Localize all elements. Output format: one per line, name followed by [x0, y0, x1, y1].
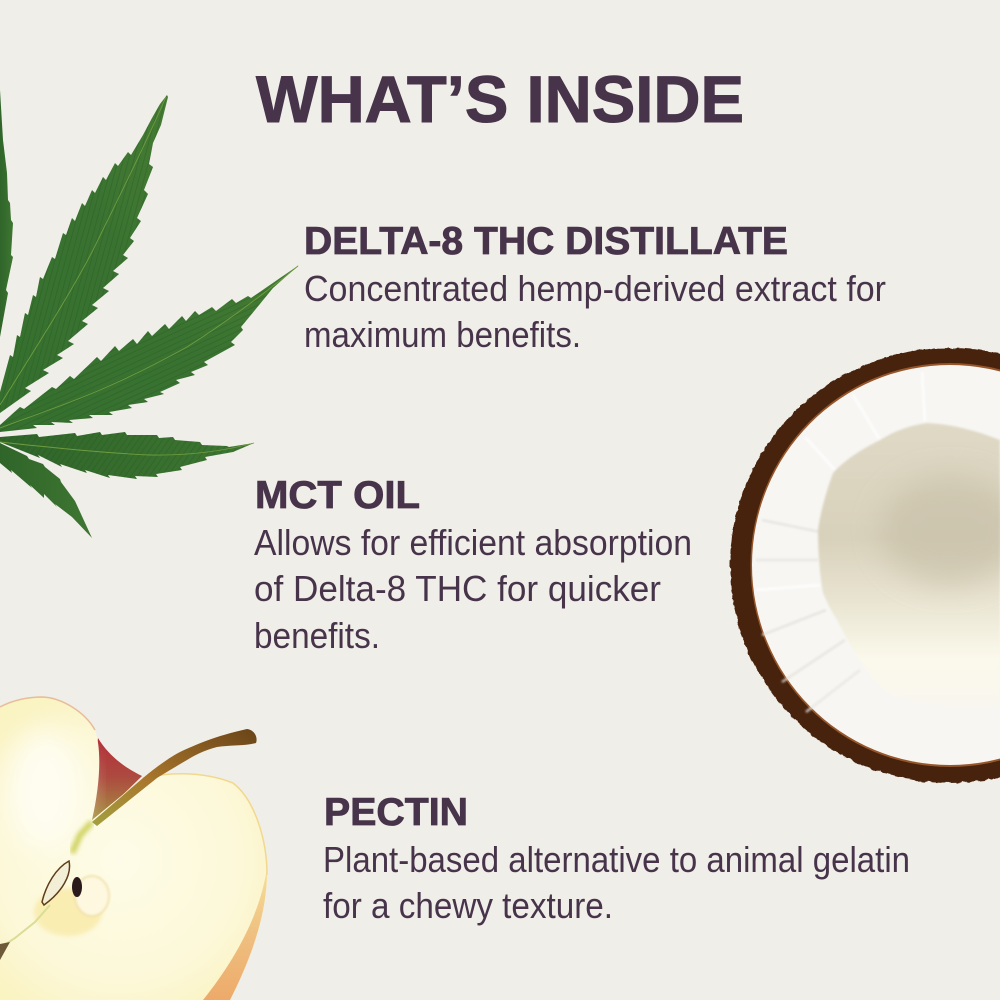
- description: of Delta-8 THC for quicker: [254, 568, 661, 609]
- flesh striations: [756, 372, 925, 712]
- lower leaflet: [0, 443, 92, 538]
- section: MCT oil: [254, 474, 692, 656]
- apple top right skin edge: [143, 774, 267, 875]
- icon: apple half: [0, 697, 267, 1000]
- apple skin edge: [0, 697, 95, 730]
- coconut white flesh: [752, 365, 1000, 765]
- right leaflet veins: [0, 265, 299, 432]
- pale seed: [42, 861, 70, 905]
- horizontal leaflet: [0, 432, 254, 479]
- icon: coconut half: [730, 348, 1000, 783]
- icon: hemp leaf: [0, 90, 299, 538]
- section: Delta-8 THC distillate: [304, 220, 886, 355]
- dark calyx: [0, 942, 10, 960]
- upper leaflet veins: [0, 95, 168, 413]
- heading: MCT OIL: [255, 474, 420, 517]
- horizontal leaflet veins: [0, 432, 254, 479]
- coconut shell: [730, 348, 1000, 783]
- leaf midribs: [0, 97, 298, 455]
- dark seed: [72, 877, 82, 897]
- cavity shadow: [880, 475, 1000, 585]
- description: [254, 522, 692, 656]
- description: for a chewy texture.: [323, 885, 613, 926]
- description: benefits.: [254, 615, 380, 656]
- heading: PECTIN: [324, 791, 468, 834]
- apple flesh: [0, 697, 267, 1000]
- apple stem: [92, 729, 257, 826]
- section: Pectin: [323, 791, 910, 926]
- right leaflet: [0, 265, 299, 432]
- coconut inner rim: [750, 363, 1000, 767]
- upper leaflet: [0, 95, 168, 413]
- coconut cavity: [818, 423, 1000, 707]
- description: Plant-based alternative to animal gelatin: [323, 839, 910, 880]
- description: Concentrated hemp-derived extract for: [304, 268, 886, 309]
- apple left lobe highlight: [7, 730, 83, 850]
- far left leaflet: [0, 90, 13, 337]
- heading: DELTA-8 THC DISTILLATE: [304, 220, 788, 263]
- title: WHAT’S INSIDE: [256, 62, 744, 136]
- description: Allows for efficient absorption: [254, 522, 692, 563]
- description: maximum benefits.: [304, 314, 581, 355]
- description: [323, 839, 910, 926]
- apple skin band: [203, 868, 267, 1000]
- apple core: [0, 822, 109, 960]
- apple back skin: [91, 738, 142, 825]
- description: [304, 268, 886, 355]
